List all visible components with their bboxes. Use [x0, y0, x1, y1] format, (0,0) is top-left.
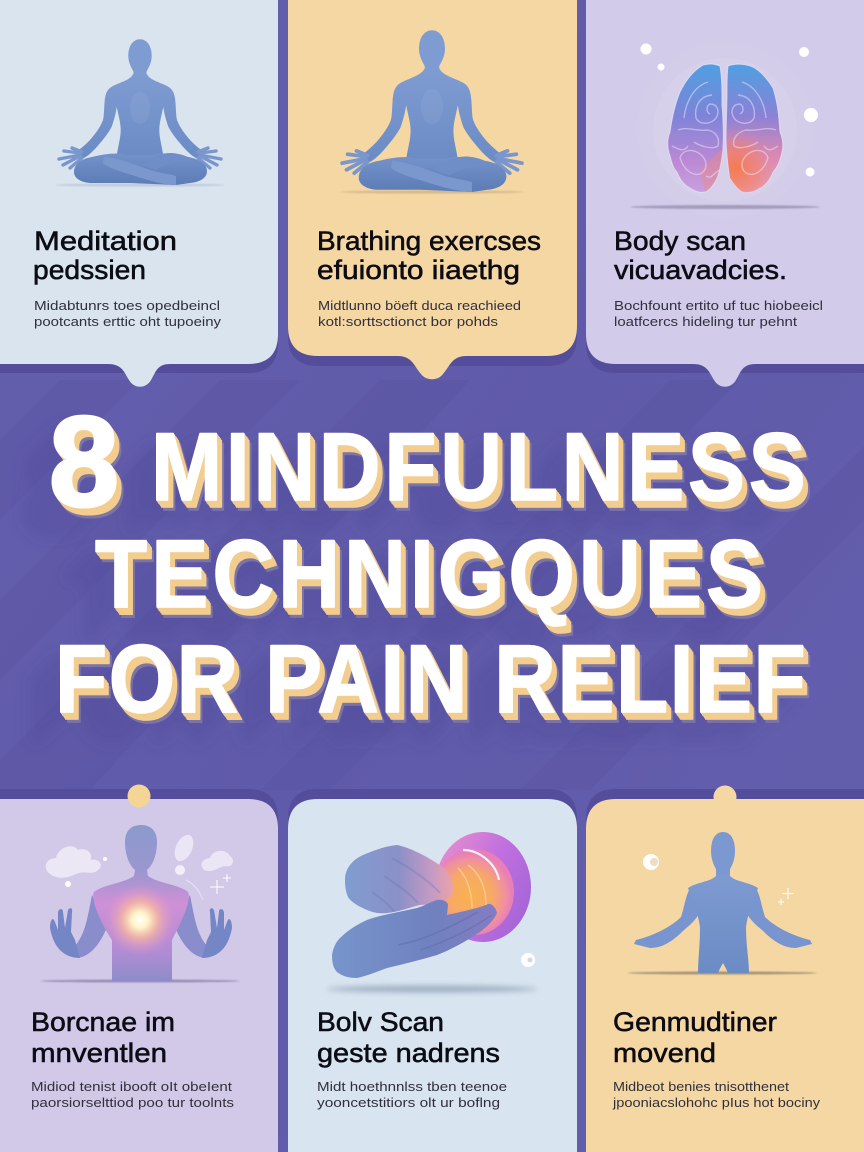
heading: meditation — [33, 226, 177, 285]
diagonal background stripes — [0, 380, 864, 790]
heading: gesture — [317, 1007, 500, 1068]
heading: breathing: efuionto iiaethg — [317, 255, 520, 285]
panel: card meditation — [0, 0, 278, 387]
icon: standing figure with open arms — [627, 832, 817, 974]
text: body scan description — [614, 298, 823, 329]
panel: card body scan — [586, 0, 864, 387]
text: movement description: Midiod tenist ibooft oIt obeIent — [31, 1079, 232, 1094]
panel: card breathing — [288, 0, 577, 379]
text: gentle movement description: Midbeot benies tnisotthenet — [613, 1079, 789, 1094]
text: meditation description — [34, 298, 222, 329]
icon: breathing figure — [340, 30, 524, 193]
heading: breathing movement — [31, 1007, 175, 1068]
icon: glowing brain — [630, 42, 820, 218]
title: MINDFULNESS — [151, 413, 806, 521]
title: FOR PAIN RELIEF — [55, 625, 806, 733]
title — [49, 391, 806, 733]
heading: gesture: Bolv Scan — [317, 1007, 444, 1037]
text: gesture description: Midt hoethnnlss tben teenoe — [317, 1079, 507, 1094]
panel: card body scan gesture — [288, 789, 577, 1152]
heading: breathing — [317, 226, 541, 285]
text: gesture description: yooncetstitiors olt ur boflng — [317, 1095, 500, 1110]
heading: breathing: Brathing exercses — [317, 226, 541, 256]
icon: hands with glowing rings — [327, 832, 537, 992]
icon: card tab dot — [714, 786, 736, 808]
title: TECHNIGQUES — [95, 520, 763, 628]
heading: breathing movement: mnventlen — [31, 1038, 167, 1068]
heading: body scan: Body scan — [614, 226, 746, 256]
heading: gentle movement — [613, 1007, 777, 1068]
heading: meditation: Meditation — [34, 226, 177, 256]
text: breathing description: Midtlunno böeft duca reachieed — [318, 298, 521, 313]
text: body scan description: loatfcercs hideling tur pehnt — [614, 314, 797, 329]
text: gesture description — [317, 1079, 507, 1110]
icon: yellow dot — [128, 784, 150, 808]
text: movement description: paorsiorselttiod poo tur toolnts — [31, 1095, 235, 1110]
heading: gesture: geste nadrens — [317, 1038, 500, 1068]
heading: body scan — [614, 226, 787, 285]
icon: meditating figure — [55, 39, 225, 186]
text: meditation description: Midabtunrs toes opedbeincl — [34, 298, 220, 313]
heading: breathing movement: Borcnae im — [31, 1007, 175, 1037]
text: breathing description — [318, 298, 521, 329]
text: gentle movement description: jpooniacslohohc pIus hot bociny — [612, 1095, 821, 1110]
icon: figure with glowing chest — [40, 825, 240, 982]
text: breathing description: kotl:sorttsctionct bor pohds — [318, 314, 499, 329]
text: gentle movement description — [612, 1079, 821, 1110]
heading: meditation: pedssien — [33, 255, 146, 285]
heading: body scan: vicuavadcies. — [614, 255, 787, 285]
panel: card gentle movement — [586, 786, 864, 1152]
title: 8 — [49, 391, 119, 534]
heading: gentle movement: Genmudtiner — [613, 1007, 777, 1037]
panel: card breathing movement — [0, 784, 278, 1152]
text: body scan description: Bochfount ertito uf tuc hiobeeicl — [614, 298, 823, 313]
text: movement description — [31, 1079, 235, 1110]
heading: gentle movement: movend — [613, 1038, 716, 1068]
text: meditation description: pootcants erttic oht tupoeiny — [34, 314, 222, 329]
